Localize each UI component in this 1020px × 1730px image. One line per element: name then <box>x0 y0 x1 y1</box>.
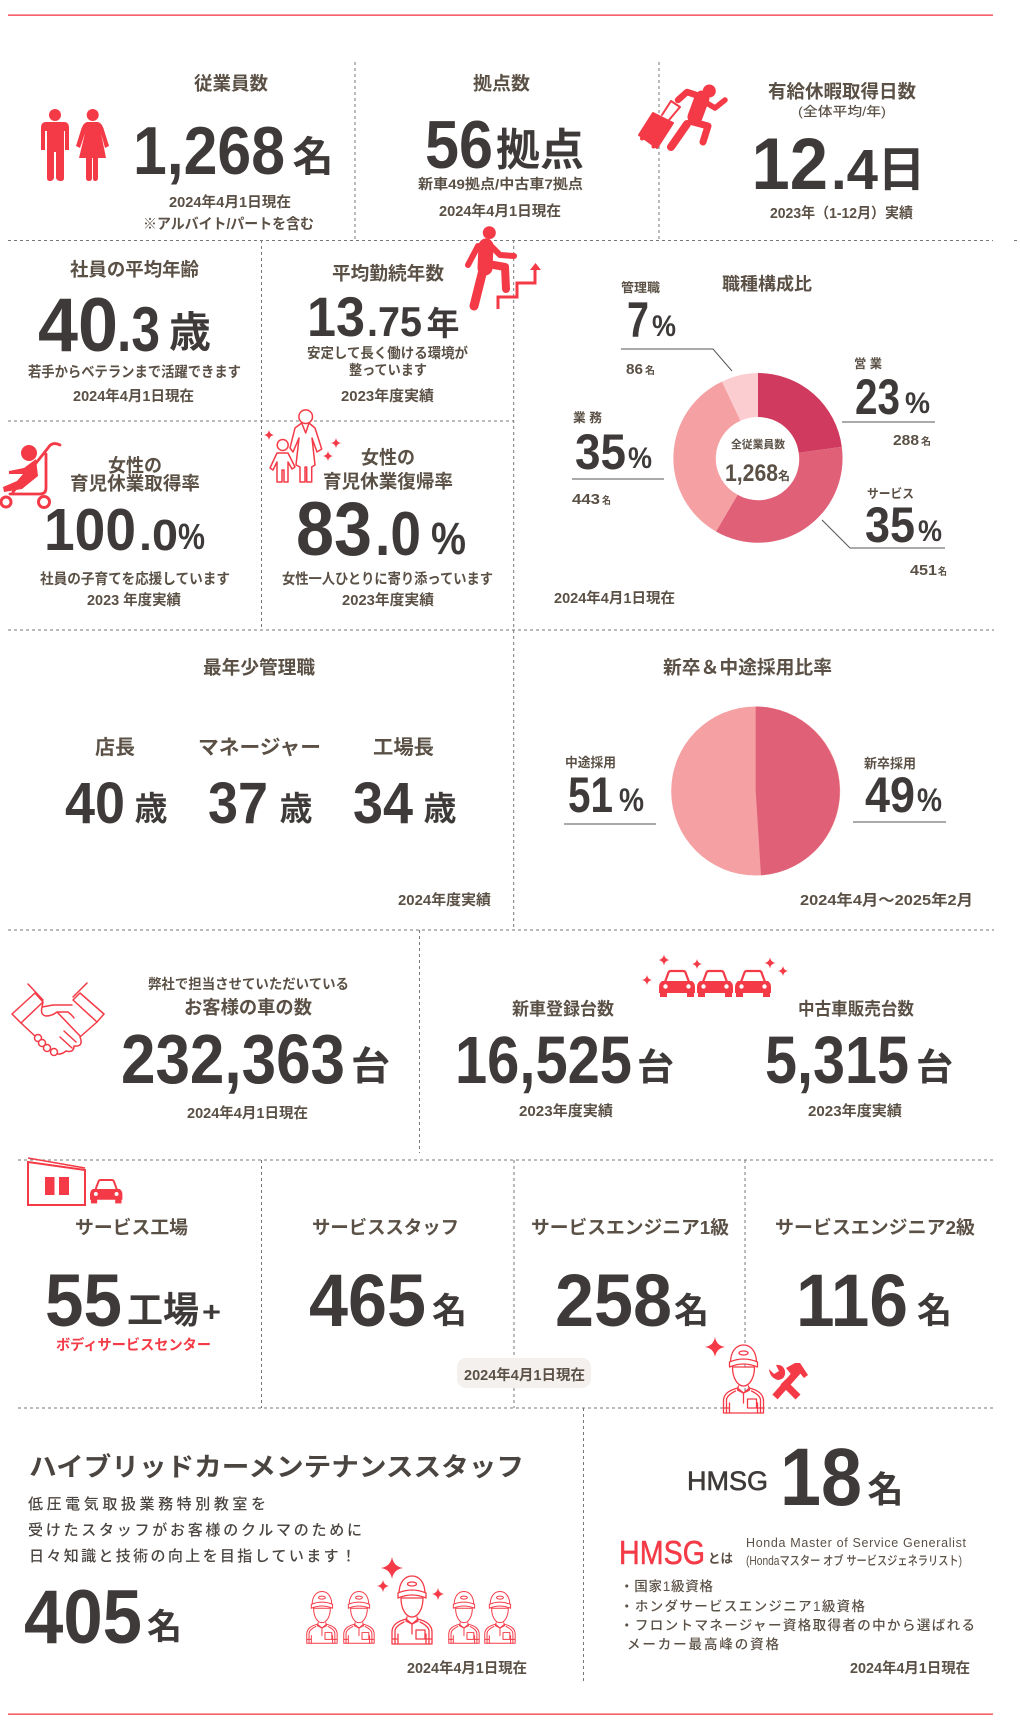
note: fiscal year: 2023 年度実績 <box>87 591 181 609</box>
label: managers: 管理職 <box>621 280 661 295</box>
qualification list: ・ホンダサービスエンジニア1級資格 <box>620 1598 866 1614</box>
value: 40: 40 <box>38 283 118 368</box>
panel: customer cars <box>12 976 390 1122</box>
label: administration: 名 <box>602 494 611 507</box>
unit: 歳 <box>134 790 168 827</box>
label: administration: 35 <box>575 424 626 480</box>
icon: factory and car <box>28 1158 122 1205</box>
caption line two: 整っています <box>349 362 427 378</box>
unit: people: 名 <box>674 1292 709 1331</box>
unit: people: 名 <box>292 134 334 180</box>
definition suffix: とは <box>708 1551 733 1566</box>
value: 83: 83 <box>296 487 372 572</box>
heading line two: 育児休業復帰率 <box>323 471 453 492</box>
value: 258: 258 <box>555 1259 672 1342</box>
label: mid-career <box>564 755 656 824</box>
label: sales <box>842 356 935 449</box>
panel: hiring ratio <box>564 657 973 909</box>
panel: service factories <box>28 1158 221 1354</box>
kicker: 弊社で担当させていただいている <box>148 976 349 992</box>
unit: days: 日 <box>878 144 926 197</box>
label: managers: 86 <box>626 362 643 378</box>
unit: cars: 台 <box>637 1047 674 1088</box>
label: service <box>822 486 947 579</box>
label: sales: 名 <box>921 435 931 448</box>
value: 465: 465 <box>309 1259 426 1342</box>
label: HMSG: HMSG <box>687 1466 768 1496</box>
note: new and used breakdown: 新車49拠点/中古車7拠点 <box>418 176 583 192</box>
value: .0: .0 <box>139 511 178 560</box>
label: managers: 名 <box>645 364 655 377</box>
value: .75: .75 <box>367 298 422 345</box>
heading: service factories: サービス工場 <box>75 1217 188 1238</box>
panel: average age <box>28 259 241 405</box>
panel: job type composition <box>554 274 947 607</box>
value: 405: 405 <box>24 1575 142 1660</box>
unit: years old: 歳 <box>169 309 211 356</box>
value: 40: 40 <box>65 771 125 836</box>
label: managers: % <box>652 310 676 343</box>
label: mid-career: 51 <box>568 767 613 823</box>
panel: locations <box>418 73 584 220</box>
description line one: 低圧電気取扱業務特別教室を <box>28 1496 266 1513</box>
unit: percent: % <box>431 513 466 564</box>
panel: engineer grade 1 <box>531 1217 729 1342</box>
date pill <box>457 1358 591 1388</box>
description line three: 日々知識と技術の向上を目指しています！ <box>29 1548 356 1565</box>
icon: three cars with sparkles <box>642 954 788 997</box>
value: 1,268: 1,268 <box>133 113 285 189</box>
caption: 女性一人ひとりに寄り添っています <box>282 570 493 588</box>
caption line one: 安定して長く働ける環境が <box>307 345 468 361</box>
note: date: 2024年4月1日現在 <box>850 1659 970 1677</box>
caption: 社員の子育てを応援しています <box>40 571 230 588</box>
panel: engineer grade 2 <box>775 1217 976 1342</box>
value: 55: 55 <box>45 1259 122 1342</box>
sublabel: body service centre: ボディサービスセンター <box>56 1336 211 1354</box>
pie chart <box>671 706 840 876</box>
label: service: 35 <box>865 497 915 553</box>
label: administration <box>572 410 664 508</box>
icon: handshake <box>12 983 104 1056</box>
value: 13: 13 <box>307 285 365 348</box>
subheading: company average per year: (全体平均/年) <box>798 104 886 119</box>
panel: return from childcare rate <box>264 410 493 609</box>
definition title: HMSG <box>619 1534 705 1571</box>
heading: average age: 社員の平均年齢 <box>70 259 199 280</box>
label: mid-career: 中途採用 <box>565 755 616 770</box>
note: fiscal year: 2023年度実績 <box>519 1102 614 1120</box>
label: new graduates <box>853 756 946 823</box>
value: 56: 56 <box>425 107 493 183</box>
heading: customer cars: お客様の車の数 <box>184 997 312 1018</box>
panel: new car registrations <box>455 999 674 1120</box>
label: new graduates: % <box>917 782 942 818</box>
label: mid-career: % <box>619 782 644 818</box>
bottom red rule <box>8 1714 993 1715</box>
label: new graduates: 新卒採用 <box>864 756 916 771</box>
heading: youngest managers: 最年少管理職 <box>203 657 315 678</box>
unit: 歳 <box>280 790 312 827</box>
heading line one: 女性の <box>361 447 415 468</box>
label: administration: % <box>628 442 652 475</box>
value: 12: 12 <box>752 124 828 205</box>
heading: engineer grade 1: サービスエンジニア1級 <box>531 1217 729 1238</box>
definition: katakana name: (Hondaマスター オブ サービスジェネラリスト) <box>746 1553 962 1568</box>
heading: engineer grade 2: サービスエンジニア2級 <box>775 1217 976 1238</box>
heading line one: 女性の <box>108 455 162 476</box>
label: store manager: 店長 <box>95 736 135 759</box>
value: 37: 37 <box>208 771 268 836</box>
heading: hiring ratio: 新卒＆中途採用比率 <box>663 657 832 678</box>
description line two: 受けたスタッフがお客様のクルマのために <box>28 1521 362 1539</box>
label: factory manager: 工場長 <box>373 736 434 759</box>
value: 116: 116 <box>796 1259 908 1342</box>
note: date: 2024年4月1日現在 <box>73 387 194 405</box>
unit: years: 年 <box>426 305 460 342</box>
icon: person climbing stairs <box>468 226 541 309</box>
panel: service staff <box>309 1217 467 1342</box>
unit: cars: 台 <box>916 1047 953 1088</box>
value: .3: .3 <box>117 295 160 365</box>
heading: paid leave days: 有給休暇取得日数 <box>768 81 916 102</box>
value: 232,363: 232,363 <box>121 1020 345 1098</box>
unit: people: 名 <box>432 1292 467 1331</box>
value: .0: .0 <box>375 500 421 569</box>
label: sales: 23 <box>855 369 900 425</box>
heading: hybrid staff: ハイブリッドカーメンテナンススタッフ <box>29 1452 524 1482</box>
note: date: 2024年4月1日現在 <box>554 589 675 607</box>
note: includes part-time: ※アルバイト/パートを含む <box>143 215 314 233</box>
label: sales: 営 業 <box>854 356 882 371</box>
heading: new car registrations: 新車登録台数 <box>512 999 614 1019</box>
panel: hybrid car maintenance staff <box>24 1452 527 1677</box>
unit: people: 名 <box>868 1469 904 1510</box>
qualification list: メーカー最高峰の資格 <box>627 1636 780 1652</box>
label: administration: 業 務 <box>573 410 602 425</box>
note: fiscal year: 2023年度実績 <box>342 591 435 609</box>
heading: average tenure: 平均勤続年数 <box>332 263 444 284</box>
unit: cars: 台 <box>351 1046 390 1089</box>
donut centre label: 全従業員数 <box>731 437 785 451</box>
heading: locations: 拠点数 <box>473 73 530 94</box>
label: service: 名 <box>938 565 947 578</box>
value: .4: .4 <box>831 138 878 202</box>
donut chart <box>673 373 843 543</box>
unit: factories: 工場 <box>127 1290 199 1331</box>
label: service: 451 <box>910 563 937 579</box>
icon: stroller <box>1 444 60 508</box>
unit: people: 名 <box>917 1292 952 1331</box>
qualification list: ・国家1級資格 <box>620 1578 714 1594</box>
heading: job type composition: 職種構成比 <box>722 274 813 294</box>
label: managers: 7 <box>627 292 649 348</box>
definition: english name: Honda Master of Service Generalist <box>746 1536 967 1550</box>
plus sign: + <box>202 1296 221 1327</box>
label: administration: 443 <box>572 492 600 508</box>
note: period: 2024年4月～2025年2月 <box>800 891 973 909</box>
caption: 若手からベテランまで活躍できます <box>28 364 241 381</box>
icon: mechanic with tools <box>705 1337 808 1413</box>
note: fiscal year: 2024年度実績 <box>398 891 492 909</box>
panel: average tenure <box>307 226 541 405</box>
icon: runner with suitcase <box>639 84 725 148</box>
label: managers <box>621 280 732 378</box>
heading: employees: 従業員数 <box>194 73 268 94</box>
heading: used car sales: 中古車販売台数 <box>798 999 914 1019</box>
date pill: 2024年4月1日現在 <box>464 1366 585 1384</box>
donut centre value: 1,268 <box>725 460 778 487</box>
value: 100: 100 <box>44 497 136 563</box>
qualification list: ・フロントマネージャー資格取得者の中から選ばれる <box>620 1618 975 1633</box>
heading: service staff: サービススタッフ <box>312 1217 459 1238</box>
value: 16,525: 16,525 <box>455 1023 632 1098</box>
unit: percent: % <box>178 516 205 557</box>
donut centre unit: 名 <box>778 468 790 483</box>
qualification list <box>620 1578 975 1652</box>
note: date: 2024年4月1日現在 <box>439 202 561 220</box>
label: service: % <box>918 515 942 548</box>
panel: employees <box>41 73 334 233</box>
unit: 歳 <box>424 790 456 827</box>
panel: paid leave <box>639 81 926 222</box>
value: 34: 34 <box>353 771 413 836</box>
top red rule <box>8 14 993 16</box>
value: 5,315: 5,315 <box>765 1023 909 1098</box>
note: fiscal year: 2023年度実績 <box>341 387 435 405</box>
label: sales: 288 <box>893 433 919 449</box>
panel: childcare leave rate <box>1 444 230 609</box>
value: 18: 18 <box>780 1432 862 1523</box>
note: period: 2023年（1-12月）実績 <box>770 204 913 222</box>
label: manager: マネージャー <box>198 736 321 759</box>
note: fiscal year: 2023年度実績 <box>808 1102 903 1120</box>
label: sales: % <box>905 387 930 420</box>
panel: used car sales <box>765 999 953 1120</box>
note: date: 2024年4月1日現在 <box>407 1659 527 1677</box>
icon: mother and child <box>264 410 341 482</box>
unit: people: 名 <box>147 1608 182 1647</box>
icon: group of five mechanics <box>307 1557 515 1644</box>
note: date: 2024年4月1日現在 <box>169 193 291 211</box>
label: service: サービス <box>867 486 914 501</box>
panel: youngest managers <box>65 657 492 909</box>
unit: locations: 拠点 <box>496 126 584 175</box>
label: new graduates: 49 <box>865 767 915 823</box>
icon: man and woman <box>41 109 109 181</box>
panel: HMSG <box>619 1432 975 1677</box>
note: date: 2024年4月1日現在 <box>187 1104 308 1122</box>
heading line two: 育児休業取得率 <box>70 473 200 494</box>
